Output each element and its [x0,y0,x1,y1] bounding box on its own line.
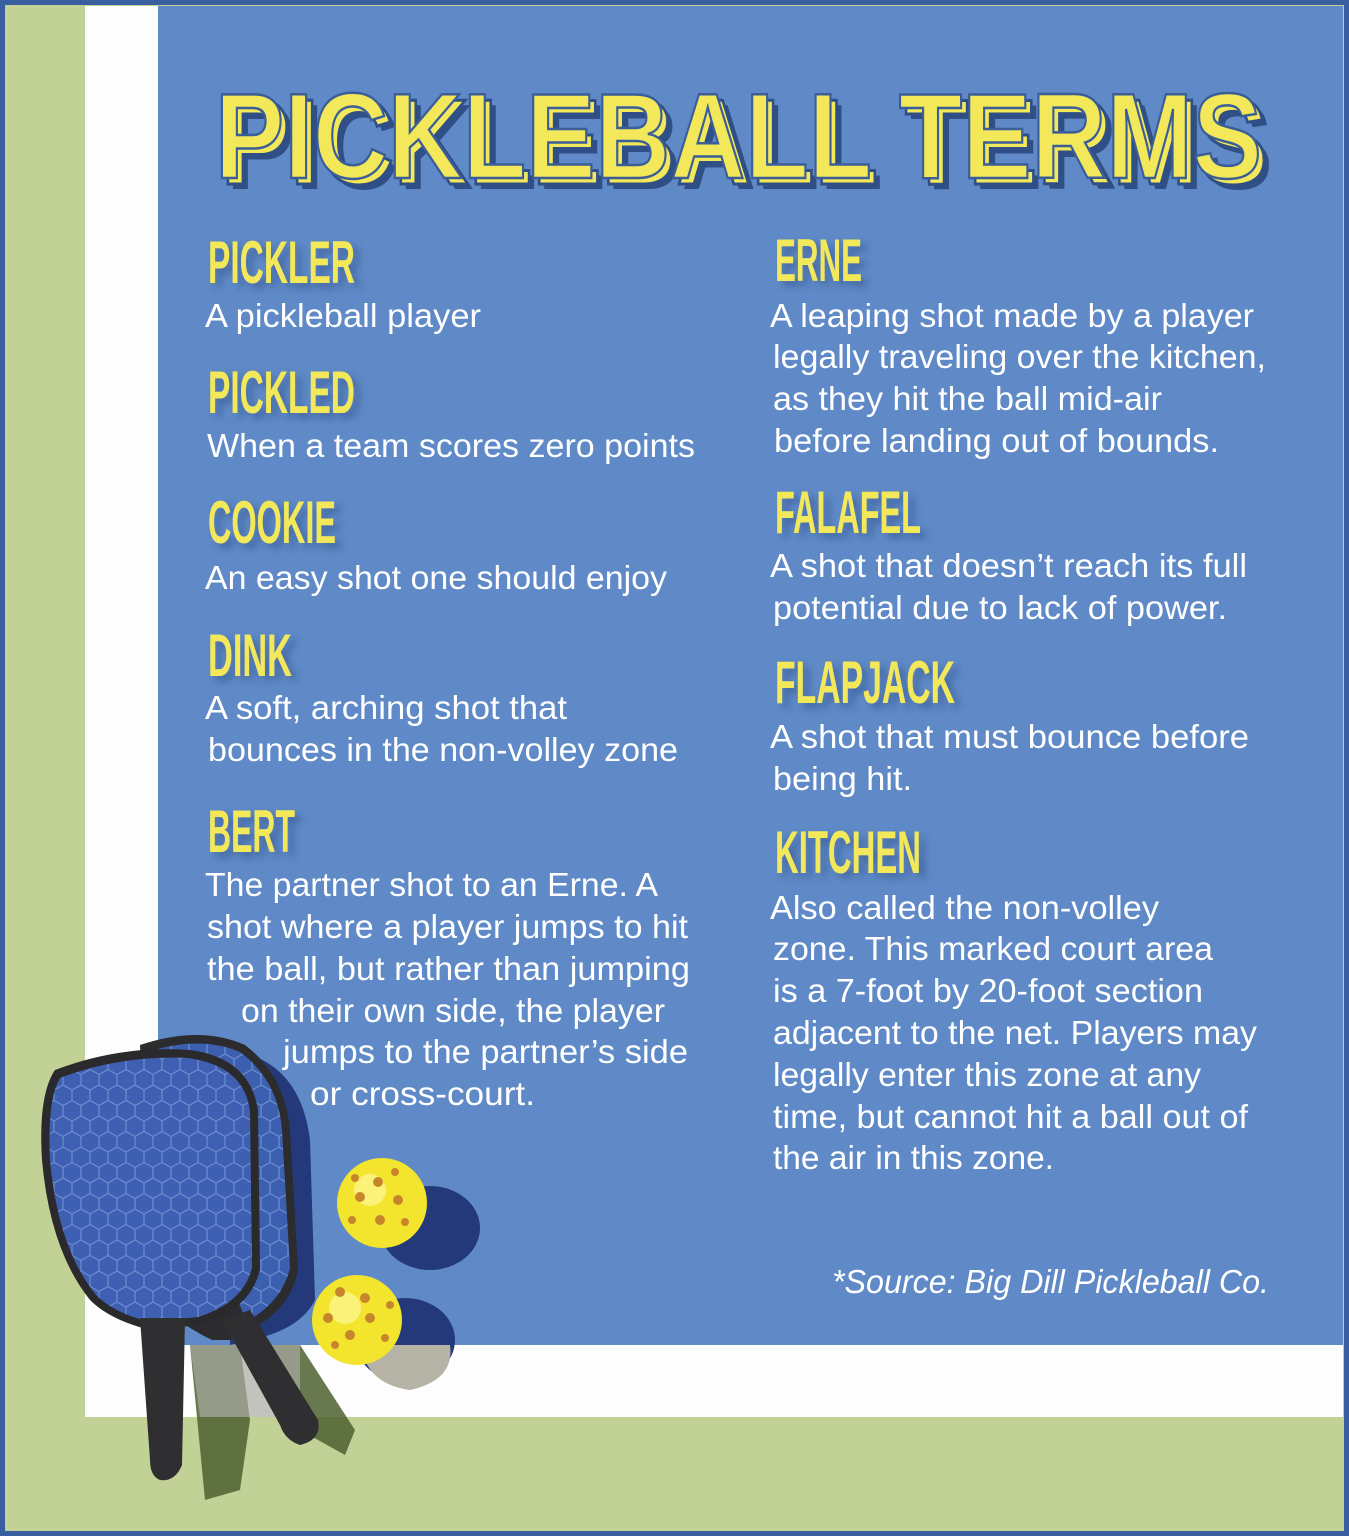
definitions text: legally traveling over the kitchen, [773,338,1266,375]
definitions text: Also called the non-volley [770,889,1160,926]
definitions text: A shot that must bounce before [770,718,1249,755]
headings: PICKLED [208,359,355,426]
source note: *Source: Big Dill Pickleball Co. [832,1263,1269,1300]
definitions text: shot where a player jumps to hit [207,908,688,945]
definitions text: the ball, but rather than jumping [207,950,690,987]
headings: BERT [208,798,295,865]
ball 2 [312,1275,402,1365]
definitions text: legally enter this zone at any [773,1056,1201,1093]
headings: FALAFEL [775,479,921,546]
ball 1 [337,1158,427,1248]
definitions text: The partner shot to an Erne. A [205,866,658,903]
blue panel [158,6,1343,1345]
definitions text: or cross-court. [310,1075,535,1112]
definitions text: A soft, arching shot that [205,689,567,726]
definitions text: the air in this zone. [773,1139,1054,1176]
front paddle [41,1049,260,1480]
definitions text: jumps to the partner’s side [282,1033,688,1070]
headings: COOKIE [208,489,336,556]
headings: ERNE [775,227,862,294]
definitions text: An easy shot one should enjoy [205,559,668,596]
definitions text [205,297,1266,1176]
definitions text: time, but cannot hit a ball out of [773,1098,1249,1135]
definitions text: is a 7-foot by 20-foot section [773,972,1203,1009]
definitions text: potential due to lack of power. [773,589,1227,626]
definitions text: A shot that doesn’t reach its full [770,547,1247,584]
definitions text: A leaping shot made by a player [770,297,1254,334]
headings: FLAPJACK [775,649,955,716]
headings: PICKLER [208,229,355,296]
definitions text: zone. This marked court area [773,930,1214,967]
illustration: paddles and balls [41,1035,480,1500]
definitions text: When a team scores zero points [207,427,695,464]
definitions text: on their own side, the player [241,992,665,1029]
back paddle [140,1035,319,1445]
definitions text: adjacent to the net. Players may [773,1014,1258,1051]
definitions text: A pickleball player [205,297,481,334]
definitions text: as they hit the ball mid-air [773,380,1162,417]
definitions text: bounces in the non-volley zone [208,731,678,768]
headings: KITCHEN [775,819,921,886]
definitions text: being hit. [773,760,912,797]
headings: DINK [208,622,292,689]
ball shadows [380,1186,480,1270]
paddle shadows [190,1050,355,1500]
headings [208,227,955,886]
definitions text: before landing out of bounds. [774,422,1219,459]
